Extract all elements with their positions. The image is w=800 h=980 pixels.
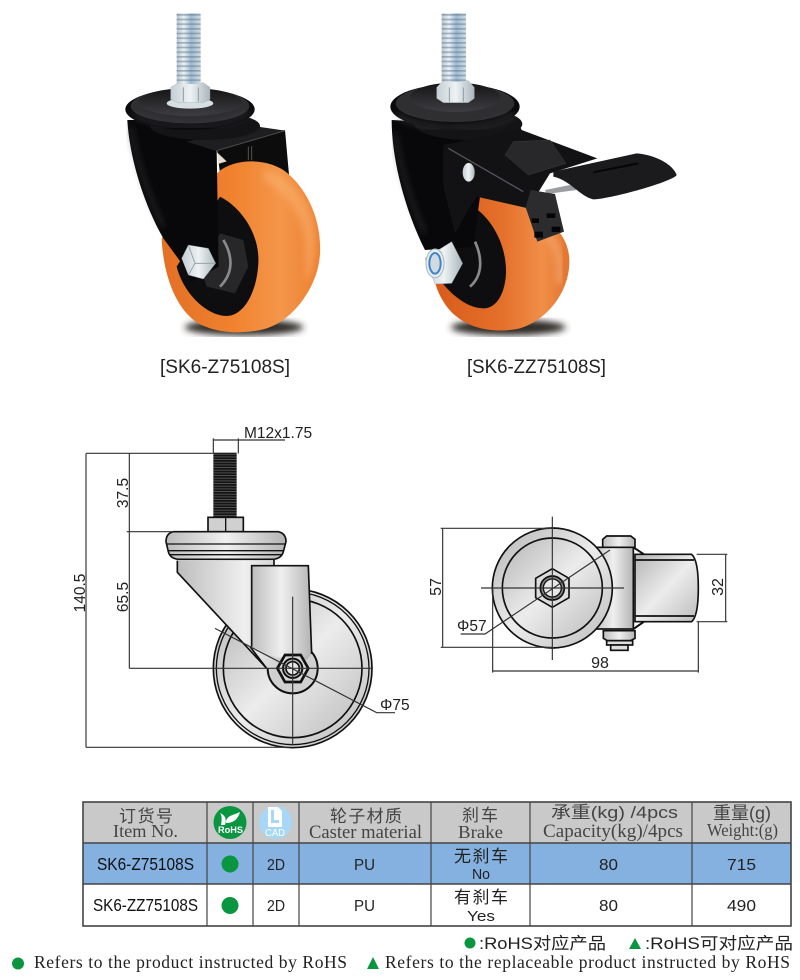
icon: RoHS: RoHS <box>218 825 243 835</box>
row: SK6-Z75108S: SK6-Z75108S <box>97 854 194 874</box>
header: capacity: 承重(kg) /4pcs <box>551 803 678 822</box>
row: SK6-ZZ75108S: 2D <box>267 898 285 915</box>
legend: RoHS Chinese: :RoHS对应产品 <box>479 934 606 953</box>
top view technical drawing <box>441 517 727 673</box>
header: caster material <box>309 807 422 843</box>
product photo: caster SK6-Z75108S <box>125 13 320 335</box>
dimension label: 65.5: 65.5 <box>115 582 132 612</box>
dimension label: 57 height: 57 <box>428 578 445 596</box>
row: SK6-Z75108S: 2D <box>267 857 285 874</box>
side view technical drawing <box>86 438 395 748</box>
header: brake: Brake <box>458 822 503 842</box>
header: caster material: Caster material <box>309 822 422 843</box>
header: capacity <box>543 803 683 842</box>
legend: RoHS English: Refers to the product instructed by RoHS <box>34 952 347 972</box>
dimension label: M12x1.75: M12x1.75 <box>244 425 312 442</box>
header: item no: Item No. <box>113 821 178 841</box>
caption: SK6-ZZ75108S: [SK6-ZZ75108S] <box>467 357 606 378</box>
icon: CAD: CAD <box>265 828 285 839</box>
dimension label: Φ57: Φ57 <box>457 618 487 635</box>
row: SK6-Z75108S: No <box>472 867 490 883</box>
row: SK6-Z75108S <box>97 847 756 883</box>
header: weight: Weight:(g) <box>707 820 778 841</box>
dimension label: 32: 32 <box>710 578 727 596</box>
row: SK6-ZZ75108S: SK6-ZZ75108S <box>93 895 198 915</box>
header: weight <box>707 803 778 841</box>
header: capacity: Capacity(kg)/4pcs <box>543 821 683 842</box>
dimension label: 140.5: 140.5 <box>72 574 89 612</box>
dimension label: Φ75: Φ75 <box>380 697 410 714</box>
row: SK6-Z75108S: PU <box>354 857 375 874</box>
dimension label: 98: 98 <box>591 655 609 672</box>
legend: RoHS Chinese: :RoHS可对应产品 <box>645 934 793 953</box>
icon: CAD <box>259 806 292 839</box>
row: SK6-ZZ75108S: 80 <box>599 898 618 915</box>
row: SK6-ZZ75108S: 有刹车 <box>454 888 508 907</box>
specification table <box>83 802 791 926</box>
header: item no <box>113 807 178 841</box>
dimension label: 37.5: 37.5 <box>115 478 132 508</box>
row: SK6-ZZ75108S: PU <box>354 898 375 915</box>
header: brake <box>458 806 503 842</box>
row: SK6-Z75108S: 无刹车 <box>454 847 508 866</box>
header: caster material: 轮子材质 <box>330 807 402 826</box>
row: SK6-ZZ75108S: 490 <box>727 898 756 915</box>
legend: RoHS Chinese <box>464 934 793 953</box>
header: brake: 刹车 <box>462 806 498 825</box>
legend: RoHS English <box>12 952 790 972</box>
product photo: caster SK6-ZZ75108S with brake <box>390 13 677 335</box>
header: item no: 订货号 <box>119 807 173 826</box>
row: SK6-Z75108S: 80 <box>599 857 618 874</box>
caption: SK6-Z75108S: [SK6-Z75108S] <box>160 357 290 378</box>
row: SK6-ZZ75108S <box>93 888 756 925</box>
row: SK6-ZZ75108S: Yes <box>467 909 495 925</box>
legend: RoHS English: Refers to the replaceable product instructed by RoHS <box>385 952 790 972</box>
header: weight: 重量(g) <box>713 803 771 823</box>
icon: RoHS <box>214 806 246 839</box>
row: SK6-Z75108S: 715 <box>727 857 756 874</box>
